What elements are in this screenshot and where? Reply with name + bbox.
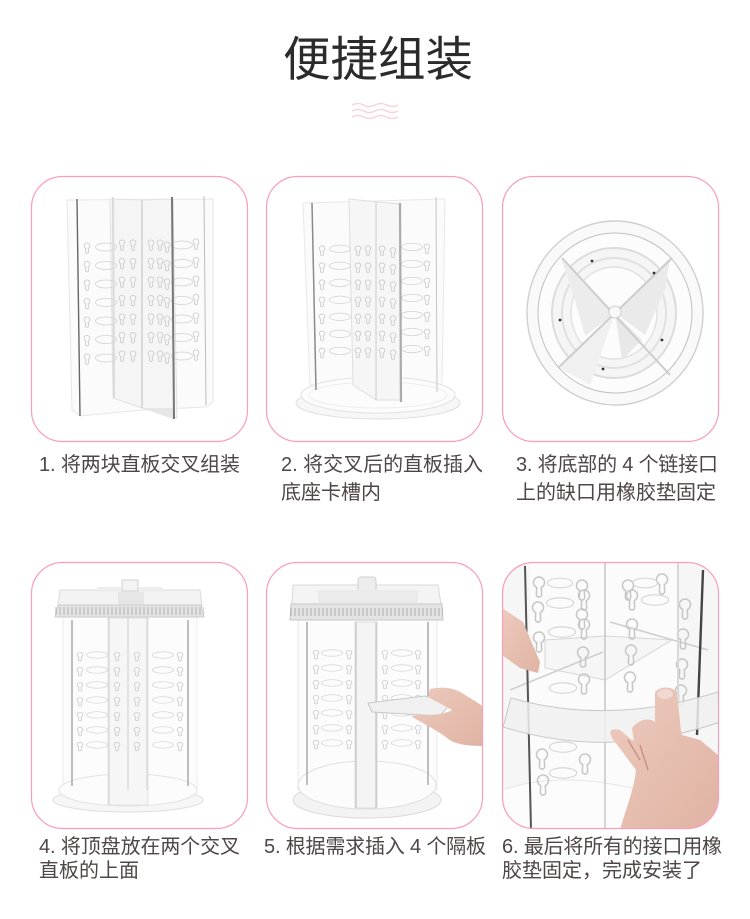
- caption 3: [516, 453, 718, 504]
- panel: step 3 bottom view: [502, 176, 718, 442]
- caption 1: 1. 将两块直板交叉组装: [39, 453, 240, 476]
- illustration: base seen from above: [527, 221, 703, 405]
- title: 便捷组装: [283, 34, 473, 87]
- caption 2: 底座卡槽内: [281, 481, 381, 504]
- caption 4: 4. 将顶盘放在两个交叉: [39, 835, 240, 858]
- hand: [411, 688, 484, 746]
- caption 4: [39, 835, 240, 882]
- illustration: tower with hand inserting a divider: [290, 577, 484, 818]
- left fingers: [502, 608, 540, 673]
- illustration: assembled tower without dividers: [53, 580, 204, 812]
- illustration: boards inserted in base: [296, 197, 460, 419]
- panel: step 4 top plate placed: [32, 562, 248, 828]
- caption 3: 上的缺口用橡胶垫固定: [516, 481, 716, 504]
- caption 6: 6. 最后将所有的接口用橡: [502, 835, 722, 858]
- caption 6: 胶垫固定，完成安装了: [502, 859, 702, 882]
- panel: step 1 crossed boards: [32, 176, 248, 442]
- caption 2: 2. 将交叉后的直板插入: [281, 453, 483, 476]
- caption 5: 5. 根据需求插入 4 个隔板: [264, 835, 486, 858]
- illustration: two crossed clear boards: [67, 196, 213, 419]
- right hand: [610, 688, 718, 830]
- panel: step 2 boards in base: [266, 176, 482, 442]
- caption 4: 直板的上面: [39, 859, 139, 882]
- caption 3: 3. 将底部的 4 个链接口: [516, 453, 718, 476]
- decorative pink wave ornament: [352, 104, 398, 118]
- caption 6: [502, 835, 722, 882]
- illustration: close-up of tower and hands: [502, 562, 720, 830]
- panel: step 5 inserting dividers: [266, 562, 484, 828]
- caption 2: [281, 453, 483, 504]
- panel: step 6 close-up hands fixing connectors: [502, 562, 720, 830]
